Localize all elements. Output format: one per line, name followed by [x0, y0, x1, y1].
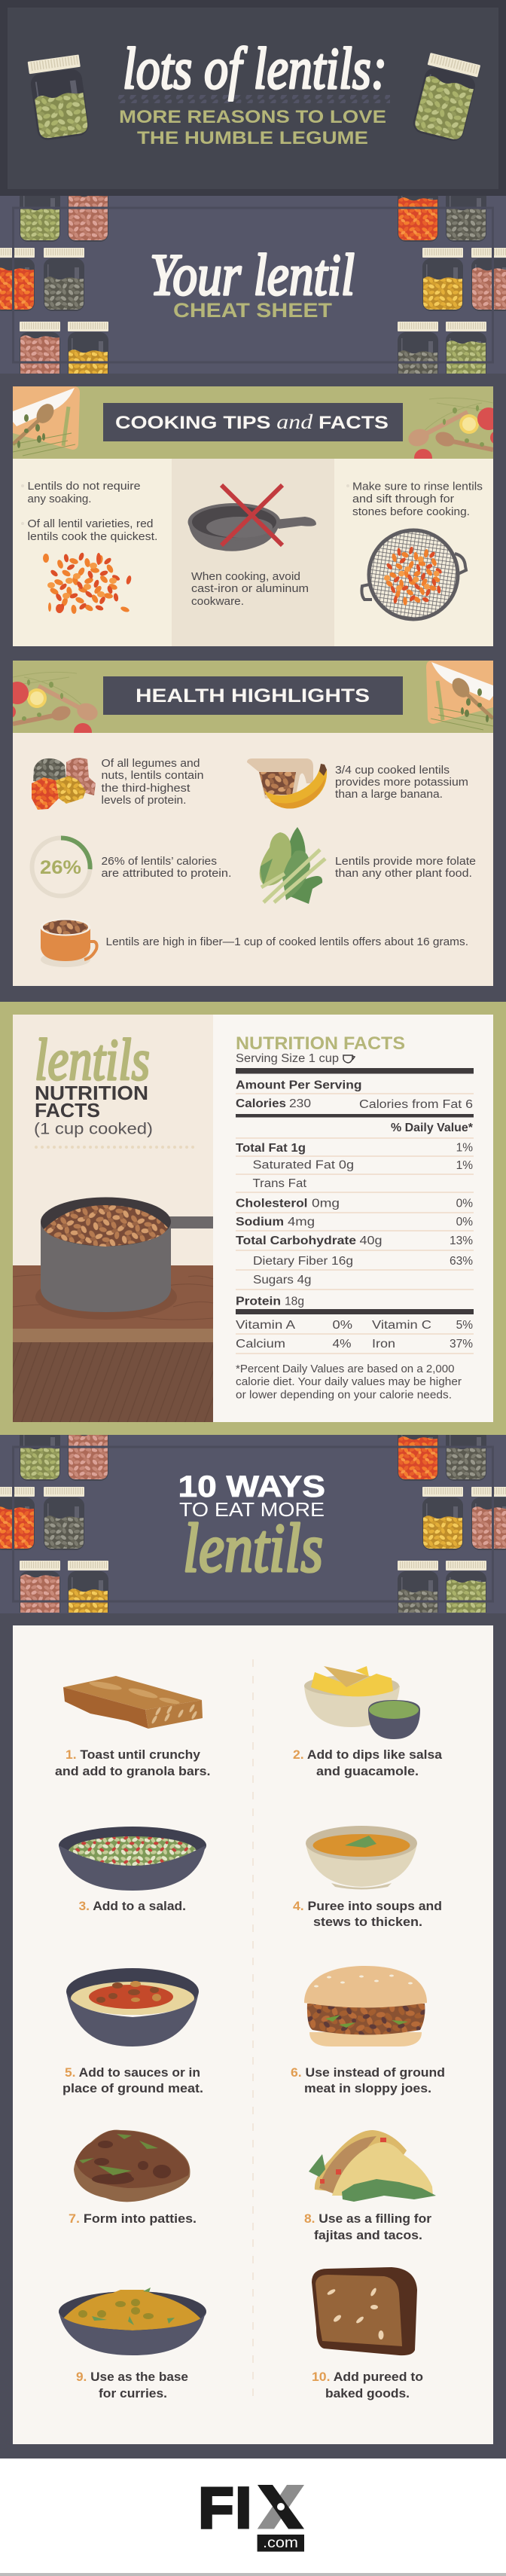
way 1 granola bar: and add to granola bars. [55, 1765, 211, 1778]
left green lentil jar [28, 54, 90, 142]
label rows: 0% [333, 1319, 352, 1332]
nutrition heading left: (1 cup cooked) [34, 1121, 153, 1137]
tip text: cookware: cookware. [191, 595, 244, 608]
tip text: rinse: Make sure to rinse lentils [352, 481, 483, 493]
text: protein levels: Of all legumes and [101, 757, 200, 770]
label rows: 1% [456, 1159, 473, 1172]
subtitle [119, 107, 386, 148]
ten ways background [0, 1435, 506, 1613]
health header decoration [13, 661, 493, 733]
panel: ten ways [13, 1625, 493, 2444]
way 5 spaghetti bowl [62, 1968, 203, 2095]
panel: cooking tips and facts [13, 386, 504, 646]
label rows: 18g [285, 1296, 304, 1308]
label footnote: or lower depending on your calorie needs. [236, 1389, 452, 1401]
tip text: rinse: and sift through for [352, 493, 454, 505]
label rows: Calcium [236, 1338, 285, 1351]
nutrition heading left: FACTS [35, 1099, 100, 1122]
label footnote: calorie diet. Your daily values may be higher [236, 1376, 462, 1388]
cooking heading: COOKING TIPS and FACTS [115, 411, 389, 433]
nutrition label [236, 1033, 474, 1401]
tips columns [13, 459, 493, 646]
icon: mixed legumes [32, 758, 96, 810]
label heading: Serving Size 1 cup [236, 1052, 339, 1065]
text: folate [335, 855, 476, 880]
label footnote [236, 1363, 462, 1401]
way 6 sloppy joe: 6. Use instead of ground [291, 2066, 445, 2080]
way 3 salad bowl [59, 1827, 206, 1913]
way 7 patty: 7. Form into patties. [69, 2212, 197, 2226]
tip text: soaking and red lentils: Lentils do not require [27, 480, 140, 493]
label footnote: *Percent Daily Values are based on a 2,000 [236, 1363, 455, 1375]
way 8 taco: 8. Use as a filling for [304, 2212, 432, 2226]
way 4 soup bowl: 4. Puree into soups and [293, 1900, 442, 1913]
chart: 26 percent ring [32, 838, 90, 896]
ten ways heading: lentils [183, 1509, 323, 1586]
subtitle: MORE REASONS TO LOVE [119, 107, 386, 127]
label rows: 4% [333, 1338, 352, 1351]
label rows: 1% [456, 1142, 473, 1154]
illustration: kitchen table [13, 1265, 213, 1422]
logo: .com [263, 2535, 298, 2551]
logo [199, 2477, 305, 2552]
label rows: Trans Fat [253, 1177, 307, 1190]
way 7 patty [69, 2130, 197, 2226]
text: potassium: than a large banana. [335, 788, 443, 801]
icon: red lentil pile [43, 552, 132, 614]
icon: crossed out skillet [188, 485, 316, 551]
way 1 granola bar [55, 1676, 211, 1778]
tip text: soaking and red lentils: Of all lentil varieties, red [27, 517, 153, 530]
logo: X [260, 2477, 298, 2540]
tip text: rinse [346, 481, 483, 518]
nutrition heading left: lentils [35, 1027, 150, 1092]
way 8 taco [304, 2130, 436, 2242]
way 5 spaghetti bowl: place of ground meat. [62, 2082, 203, 2095]
label heading [236, 1033, 405, 1065]
dark background band [0, 374, 506, 1002]
label rows: Calories from Fat 6 [359, 1098, 473, 1111]
text: calories from protein: 26% of lentils’ calories [101, 855, 217, 868]
way 6 sloppy joe [291, 1966, 445, 2095]
icon: lentil cup with banana [247, 758, 327, 809]
cheat sheet heading: CHEAT SHEET [173, 299, 333, 322]
text: protein levels: nuts, lentils contain [101, 769, 203, 782]
way 3 salad bowl: 3. Add to a salad. [78, 1900, 186, 1913]
way 10 bread: 10. Add pureed to [312, 2370, 423, 2384]
way 2 dips [293, 1666, 443, 1778]
nutrition heading left: NUTRITION [35, 1082, 148, 1104]
label rows: 63% [450, 1255, 473, 1268]
nutrition heading left [34, 1027, 194, 1147]
label rows: 0mg [312, 1198, 340, 1210]
ten ways heading: 10 WAYS [178, 1470, 325, 1503]
label rows: 0% [456, 1198, 473, 1210]
way 9 curry bowl: for curries. [99, 2387, 167, 2401]
label rows: Total Fat 1g [236, 1142, 306, 1155]
decorative lentil band [117, 95, 390, 103]
chart: 26 percent ring: 26% [40, 857, 81, 878]
tip text: soaking and red lentils: lentils cook the quickest. [27, 530, 158, 543]
way 10 bread: baked goods. [325, 2387, 410, 2401]
lower dark band [0, 1613, 506, 2458]
text: calories from protein: are attributed to protein. [101, 867, 232, 880]
logo: F [199, 2477, 233, 2540]
health heading [103, 676, 403, 715]
way 9 curry bowl: 9. Use as the base [76, 2370, 188, 2384]
label rows: Iron [372, 1338, 395, 1351]
text: potassium: provides more potassium [335, 776, 468, 789]
way 2 dips: and guacamole. [316, 1765, 419, 1778]
text: folate: Lentils provide more folate [335, 855, 476, 868]
text: folate: than any other plant food. [335, 867, 472, 880]
panel: nutrition facts [0, 1002, 506, 1435]
tip text: cookware: cast-iron or aluminum [191, 582, 309, 595]
way 9 curry bowl [59, 2288, 206, 2401]
top banner background [0, 0, 506, 196]
label rows: 40g [360, 1235, 383, 1247]
tip text: soaking and red lentils [21, 480, 158, 543]
tip text: cookware: When cooking, avoid [191, 570, 300, 583]
way 8 taco: fajitas and tacos. [314, 2229, 422, 2242]
label rows: Calories [236, 1097, 286, 1110]
label rows: Sodium [236, 1216, 284, 1228]
illustration: pot of lentils [35, 1198, 213, 1320]
logo: I [236, 2477, 251, 2540]
way 4 soup bowl: stews to thicken. [313, 1915, 422, 1929]
way 10 bread [312, 2267, 423, 2401]
label rows: Vitamin A [236, 1319, 296, 1332]
label rows: Amount Per Serving [236, 1079, 361, 1092]
icon: leafy greens [260, 827, 325, 904]
label rows: 13% [450, 1235, 473, 1247]
text: potassium [335, 764, 468, 801]
label rows: 37% [450, 1338, 473, 1351]
cooking header decoration [13, 386, 493, 459]
text: calories from protein [101, 855, 232, 880]
label heading: NUTRITION FACTS [236, 1033, 405, 1054]
label rows: Sugars 4g [253, 1274, 312, 1286]
way 4 soup bowl [293, 1826, 442, 1929]
way 2 dips: 2. Add to dips like salsa [293, 1748, 443, 1762]
footer background [0, 2458, 506, 2576]
label rows: 4mg [288, 1216, 315, 1228]
cheat sheet background [0, 196, 506, 374]
icon: strainer with lentils [361, 530, 466, 619]
ten ways heading: TO EAT MORE [179, 1498, 325, 1521]
text: protein levels [101, 757, 203, 807]
panel: health highlights [2, 661, 493, 986]
label rows: 0% [456, 1216, 473, 1228]
jar shelf [0, 179, 506, 385]
tip text: soaking and red lentils: any soaking. [27, 493, 92, 505]
icon: mug of lentils [41, 919, 97, 967]
label rows: Saturated Fat 0g [253, 1158, 354, 1172]
cheat sheet heading: Your lentil [150, 242, 355, 307]
label rows: Vitamin C [372, 1319, 431, 1332]
text: protein levels: the third-highest [101, 782, 191, 795]
way 1 granola bar: 1. Toast until crunchy [66, 1748, 201, 1762]
label rows: 5% [456, 1319, 473, 1332]
label rows: Total Carbohydrate [236, 1235, 356, 1247]
label rows: % Daily Value* [391, 1122, 474, 1134]
label rules [236, 1068, 474, 1354]
tip text: cookware [191, 570, 309, 608]
main title: lots of lentils: [123, 35, 387, 101]
cooking heading [103, 403, 403, 441]
subtitle: THE HUMBLE LEGUME [137, 128, 368, 148]
label rows: Protein [236, 1296, 281, 1308]
right green lentil jar [411, 53, 480, 143]
way 6 sloppy joe: meat in sloppy joes. [304, 2082, 431, 2095]
health body [13, 733, 493, 986]
ten ways heading [178, 1470, 325, 1586]
text: potassium: 3/4 cup cooked lentils [335, 764, 450, 777]
health heading: HEALTH HIGHLIGHTS [136, 685, 370, 707]
way 5 spaghetti bowl: 5. Add to sauces or in [65, 2066, 200, 2080]
label rows [236, 1079, 474, 1351]
jar shelf repeated [0, 1418, 506, 1624]
label rows: 230 [289, 1097, 311, 1110]
label rows: Dietary Fiber 16g [253, 1255, 353, 1268]
text: protein levels: levels of protein. [101, 794, 187, 807]
text: fiber: Lentils are high in fiber—1 cup of cooked lentils offers about 16 grams. [105, 935, 468, 948]
label rows: Cholesterol [236, 1198, 307, 1210]
tip text: rinse: stones before cooking. [352, 505, 470, 518]
